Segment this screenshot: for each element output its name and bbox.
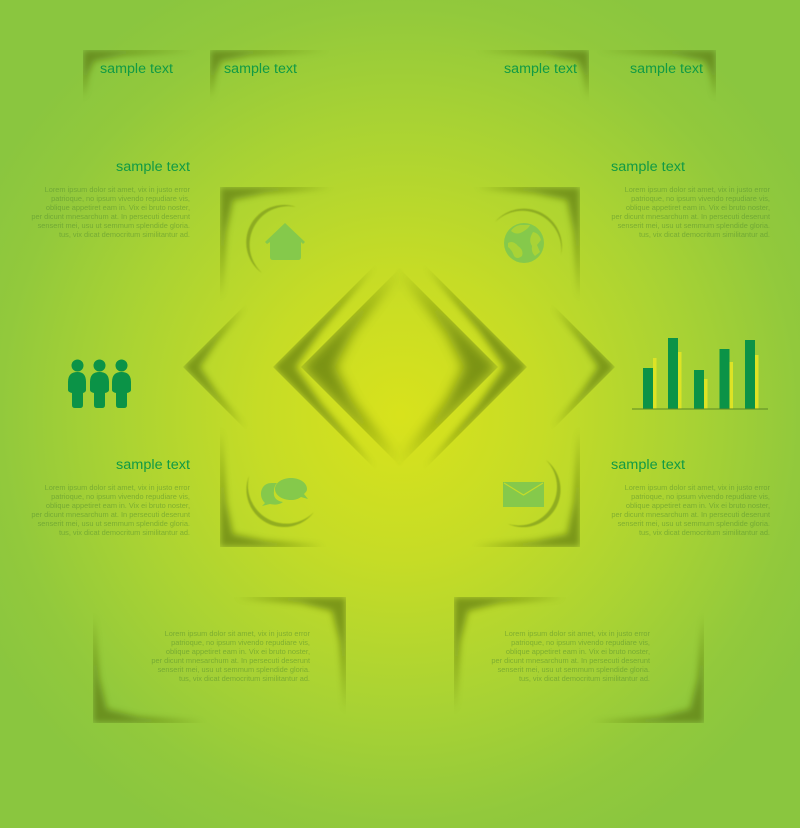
text block: lower right: oblique appetiret eam in. Vix ei bruto noster, [626,501,770,510]
panel: top tab 1 [83,50,177,92]
text block: lower left [31,457,191,537]
heading: tab 2 label: sample text [224,61,297,76]
text block: upper right [611,159,771,239]
text block: bottom right copy: per dicunt mnesarchum at. In persecuti deserunt [491,656,650,665]
text block: lower left: oblique appetiret eam in. Vix ei bruto noster, [46,501,190,510]
text block: bottom left copy: patrioque, no ipsum vivendo repudiare vis, [171,638,310,647]
text block: lower right: tus, vix dicat democritum similitantur ad. [639,528,770,537]
text block: bottom left copy: Lorem ipsum dolor sit amet, vix in justo error [165,629,311,638]
icon: people [68,360,131,408]
text block: bottom right copy: senserit mei, usu ut semmum splendide gloria. [498,665,650,674]
panel: top tab 4 [618,50,716,92]
text block: bottom left copy: oblique appetiret eam in. Vix ei bruto noster, [166,647,310,656]
text block: bottom left copy: per dicunt mnesarchum at. In persecuti deserunt [151,656,310,665]
heading: tab 4 label: sample text [630,61,703,76]
icon: globe [504,223,544,263]
panel: mail corner [485,442,580,547]
text block: bottom left copy [151,629,311,683]
text block: lower right [611,457,771,537]
panel: bottom right [454,597,704,723]
text block: upper left: senserit mei, usu ut semmum splendide gloria. [38,221,190,230]
text block: lower left: patrioque, no ipsum vivendo repudiare vis, [51,492,190,501]
icon: crescent chat [246,476,314,527]
text block: bottom right copy [491,629,651,683]
text block: upper left: oblique appetiret eam in. Vix ei bruto noster, [46,203,190,212]
text block: bottom right copy: tus, vix dicat democritum similitantur ad. [519,674,650,683]
text block: upper right: senserit mei, usu ut semmum splendide gloria. [618,221,770,230]
text block: upper right: Lorem ipsum dolor sit amet, vix in justo error [625,185,771,194]
shape: outer diamond [273,267,527,467]
arrow: right chevron [558,312,614,422]
shape: inner diamond [301,271,498,463]
text block: bottom right copy: Lorem ipsum dolor sit amet, vix in justo error [505,629,651,638]
panel: globe corner [487,187,580,286]
bar chart [632,338,768,410]
icon: crescent home [246,205,296,273]
heading: tab 3 label: sample text [504,61,577,76]
icon: crescent globe [495,209,562,255]
heading: upper right: sample text [611,159,685,174]
text block: upper left: tus, vix dicat democritum similitantur ad. [59,230,190,239]
text block: upper left: patrioque, no ipsum vivendo repudiare vis, [51,194,190,203]
text block: lower left: tus, vix dicat democritum similitantur ad. [59,528,190,537]
icon: crescent mail [508,460,561,527]
text block: lower right: per dicunt mnesarchum at. In persecuti deserunt [611,510,770,519]
text block: lower right: Lorem ipsum dolor sit amet, vix in justo error [625,483,771,492]
panel: bottom left [93,597,346,723]
text block: lower right: senserit mei, usu ut semmum splendide gloria. [618,519,770,528]
text block: lower left: per dicunt mnesarchum at. In persecuti deserunt [31,510,190,519]
heading: upper left: sample text [116,159,190,174]
panel: top tab 2 [210,50,310,92]
arrow: left chevron [184,312,240,422]
heading: lower right: sample text [611,457,685,472]
text block: lower left: Lorem ipsum dolor sit amet, vix in justo error [45,483,191,492]
text block: upper left: Lorem ipsum dolor sit amet, vix in justo error [45,185,191,194]
icon: envelope [503,482,544,507]
heading: tab 1 label: sample text [100,61,173,76]
text block: upper right: per dicunt mnesarchum at. In persecuti deserunt [611,212,770,221]
text block: upper left: per dicunt mnesarchum at. In persecuti deserunt [31,212,190,221]
text block: upper left [31,159,191,239]
icon: home [265,223,305,260]
text block: lower left: senserit mei, usu ut semmum splendide gloria. [38,519,190,528]
text block: upper right: patrioque, no ipsum vivendo repudiare vis, [631,194,770,203]
icon: chat bubbles [261,478,308,506]
heading: lower left: sample text [116,457,190,472]
text block: bottom left copy: senserit mei, usu ut semmum splendide gloria. [158,665,310,674]
text block: bottom left copy: tus, vix dicat democritum similitantur ad. [179,674,310,683]
panel: home corner [220,187,320,286]
text block: bottom right copy: oblique appetiret eam in. Vix ei bruto noster, [506,647,650,656]
panel: top tab 3 [493,50,589,92]
text block: bottom right copy: patrioque, no ipsum vivendo repudiare vis, [511,638,650,647]
text block: upper right: oblique appetiret eam in. Vix ei bruto noster, [626,203,770,212]
panel: chat corner [220,442,315,547]
text block: upper right: tus, vix dicat democritum similitantur ad. [639,230,770,239]
text block: lower right: patrioque, no ipsum vivendo repudiare vis, [631,492,770,501]
